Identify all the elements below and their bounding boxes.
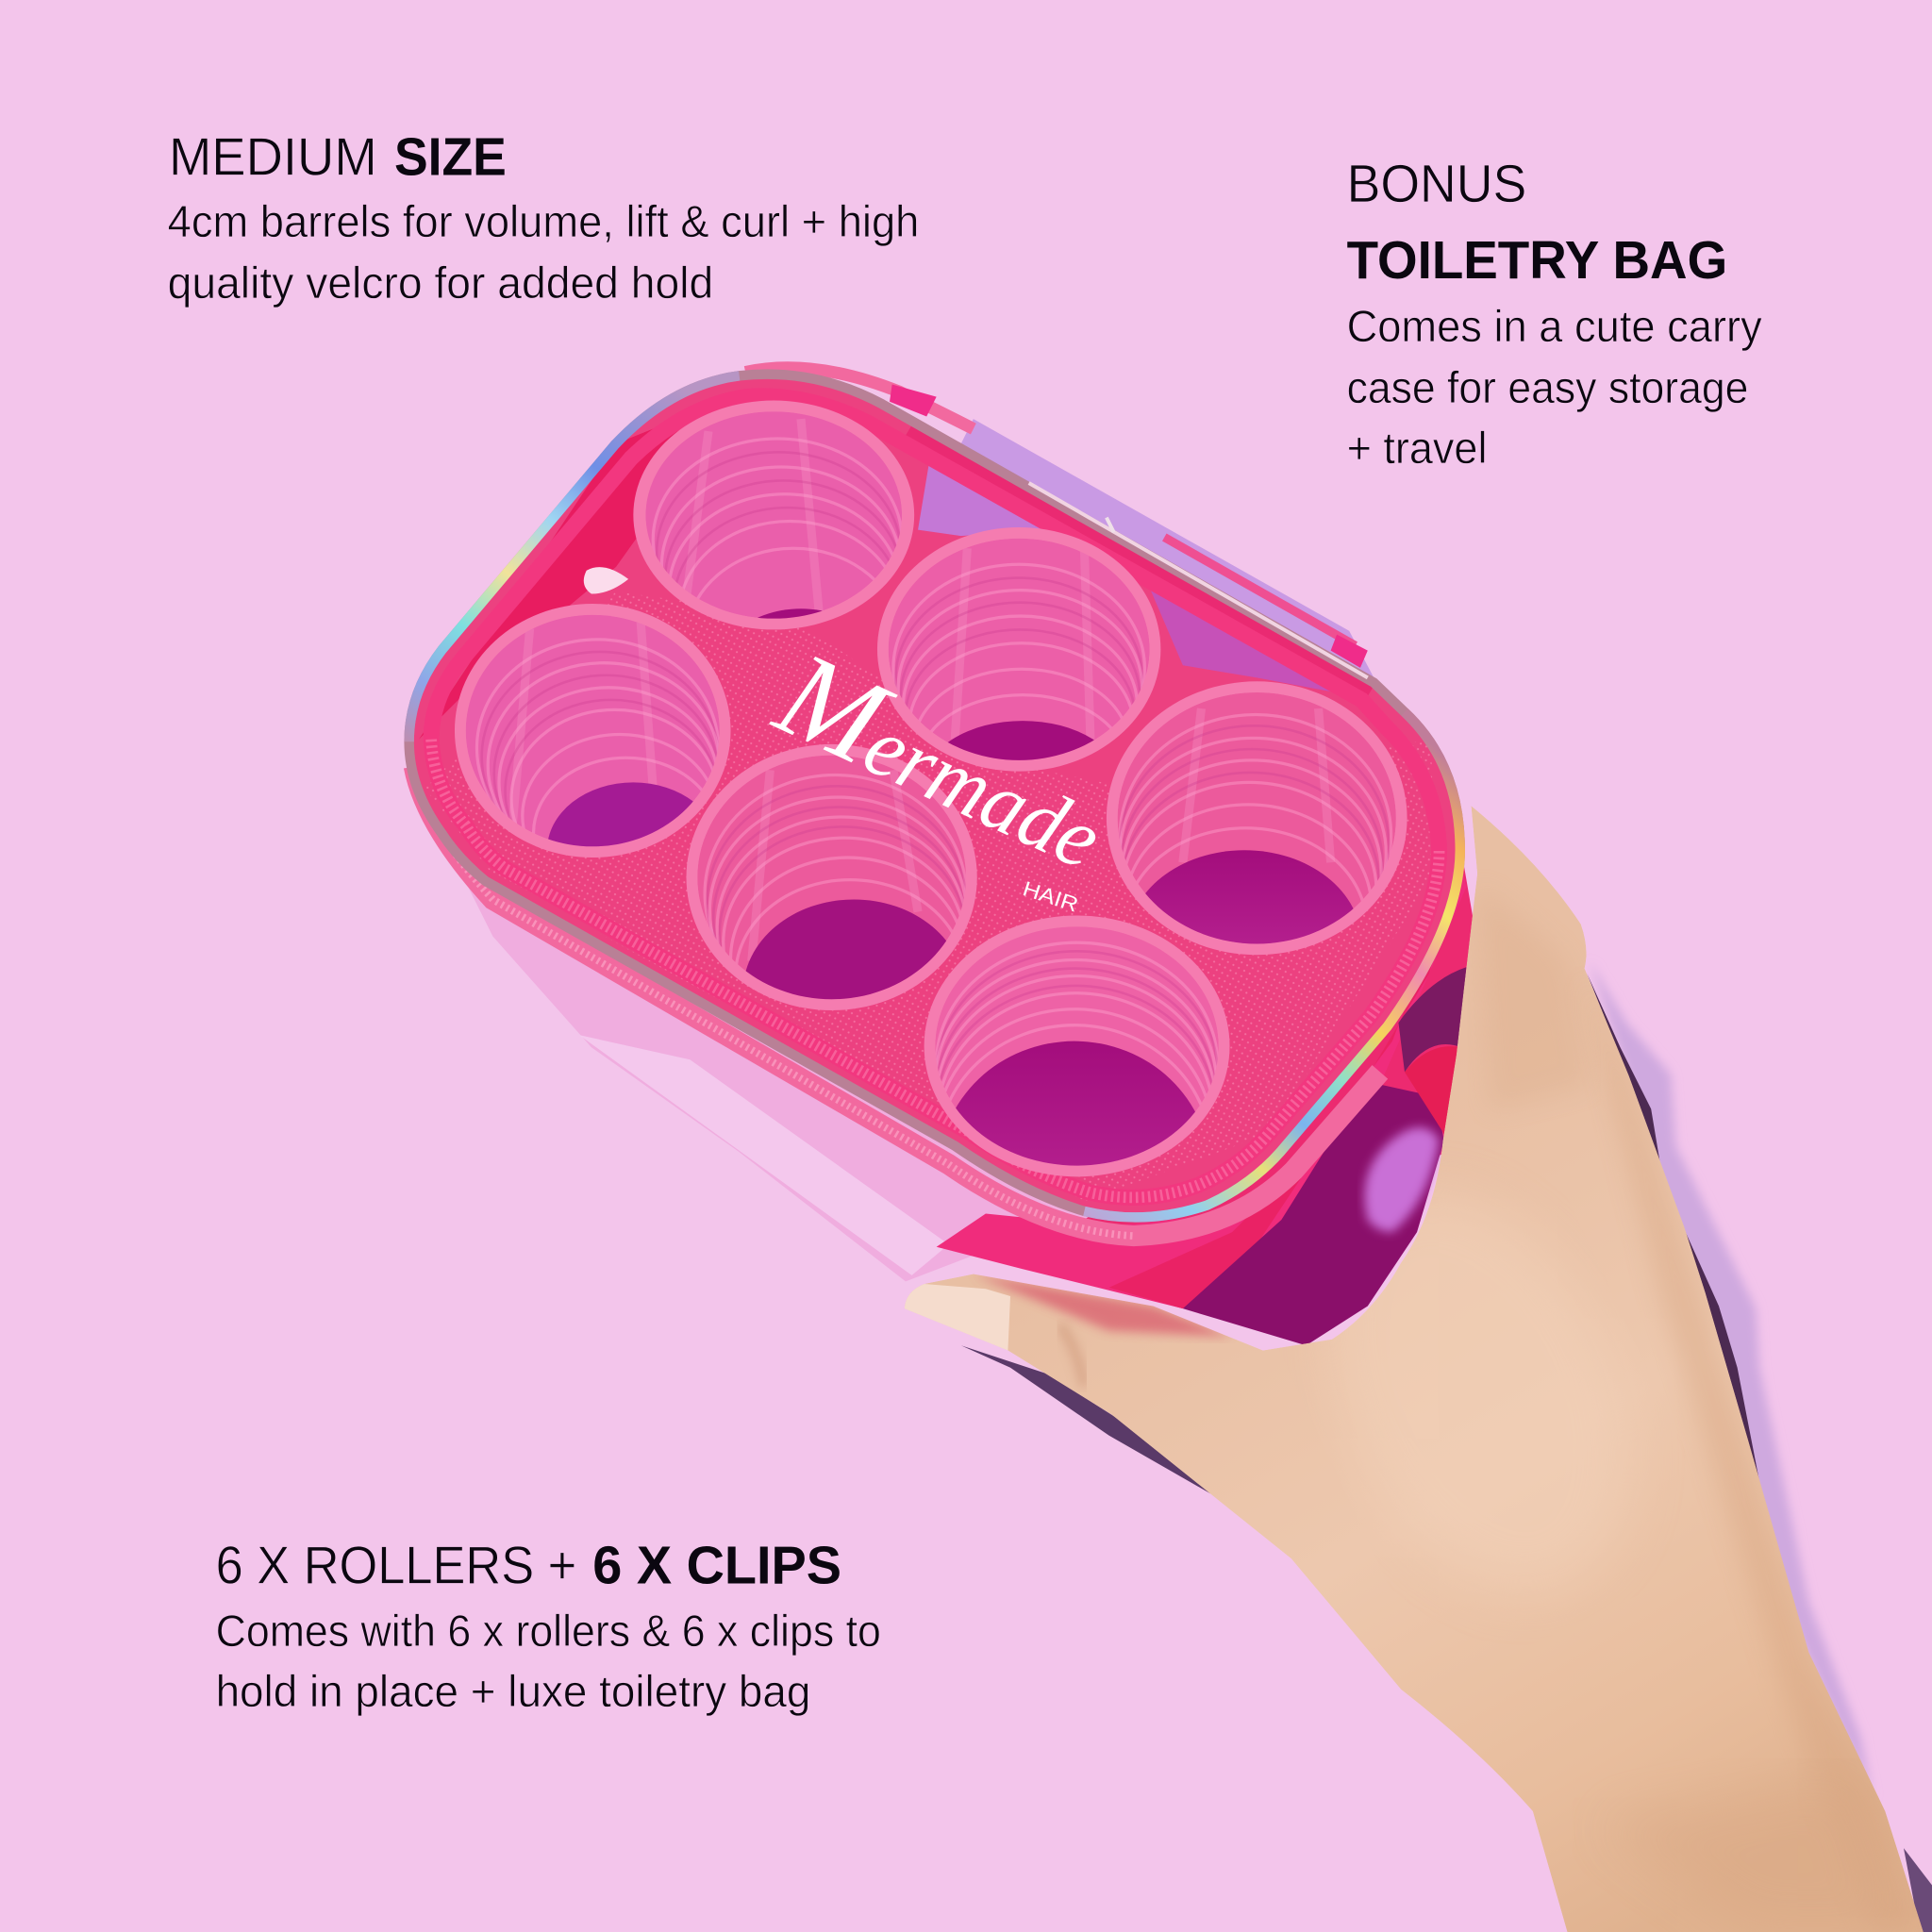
- lilac window reflection: [918, 466, 1040, 536]
- top right stitched edge: [1164, 537, 1356, 645]
- rim: metallic frame: [409, 375, 1460, 1217]
- thumb nail: [905, 1284, 1010, 1351]
- knuckle shading: [1494, 924, 1576, 1091]
- red finger behind bag: [1405, 1046, 1461, 1140]
- red wall reflection: [1109, 862, 1461, 1308]
- roller 1: [633, 400, 915, 630]
- heading: size: SIZE: [394, 127, 507, 187]
- velcro texture: [425, 591, 1441, 1201]
- bag body: clear plastic lower wall: [419, 789, 1232, 1281]
- magenta window corners: [419, 428, 679, 739]
- inner woven tape: [431, 396, 1440, 1197]
- thumb crease: [1059, 1324, 1084, 1386]
- top zipper edge: [745, 368, 974, 429]
- heading: toiletry bag: TOILETRY BAG: [1347, 231, 1727, 291]
- clear plastic reflections: [579, 1035, 949, 1275]
- heading: bonus: BONUS: [1347, 155, 1526, 214]
- hand: [905, 806, 1924, 1932]
- text block: medium size: [168, 127, 919, 308]
- tape weave: [431, 740, 1440, 1197]
- hot pink side wall: [937, 850, 1466, 1308]
- text: barrel description line two: quality velcro for added hold: [168, 258, 713, 308]
- lilac highlight inside bag: [1365, 1127, 1440, 1232]
- roller 4: [687, 743, 977, 1010]
- dark purple bag interior: [1183, 1082, 1444, 1345]
- zipper teeth: [414, 766, 1134, 1236]
- logo word: Mermade: [757, 625, 1128, 895]
- dark gap between fingers: [1398, 967, 1466, 1072]
- heading: 6 x rollers: 6 X ROLLERS +: [216, 1536, 576, 1595]
- text block: bonus toiletry bag: [1347, 155, 1762, 473]
- hand cast shadow: [961, 961, 1932, 1932]
- velcro core and window contents: [419, 394, 1441, 1201]
- zipper band: [414, 766, 1380, 1236]
- roller 5: [1106, 681, 1407, 955]
- text: contents line one: Comes with 6 x rollers & 6 x clips to: [216, 1606, 881, 1656]
- tray base inside rim: [409, 375, 1460, 1217]
- red reflection on thumb: [974, 1274, 1232, 1337]
- zipper pull tab: [890, 385, 937, 416]
- heading: medium: MEDIUM: [169, 127, 377, 187]
- soft highlight on back of hand: [1351, 1214, 1592, 1562]
- text block: rollers and clips: [216, 1536, 881, 1716]
- red band top edge: [912, 425, 1368, 696]
- rim: holographic bottom-right section: [1084, 712, 1460, 1217]
- shaded edge along wrist: [1608, 1060, 1913, 1901]
- rim: clasp: [1107, 518, 1114, 532]
- text: carry case line two: case for easy storage: [1347, 362, 1748, 412]
- text: contents line two: hold in place + luxe toiletry bag: [216, 1666, 810, 1716]
- lilac clear wall behind rim: [961, 419, 1374, 677]
- wrist shading: [1602, 1774, 1897, 1932]
- hand silhouette: [905, 806, 1924, 1932]
- logo: Mermade Hair: [757, 625, 1128, 917]
- text: carry case line one: Comes in a cute carry: [1347, 301, 1762, 351]
- toiletry bag: [409, 368, 1476, 1345]
- zipper end tab: [1331, 635, 1368, 668]
- roller 2: [455, 604, 730, 858]
- glare on window: [584, 567, 628, 594]
- backdrop behind side wall: [1010, 850, 1476, 1308]
- purple window area right: [1151, 591, 1330, 691]
- heading: 6 x clips: 6 X CLIPS: [592, 1536, 841, 1595]
- text: carry case line three: + travel: [1347, 423, 1487, 473]
- roller 3: [877, 527, 1160, 772]
- rim: holographic top-left section: [409, 375, 740, 741]
- text: barrel description line one: 4cm barrels for volume, lift & curl + high: [168, 196, 919, 246]
- logo sub word: HAIR: [1020, 876, 1081, 917]
- rim: silver highlight: [1029, 483, 1368, 677]
- roller 6: [924, 915, 1230, 1177]
